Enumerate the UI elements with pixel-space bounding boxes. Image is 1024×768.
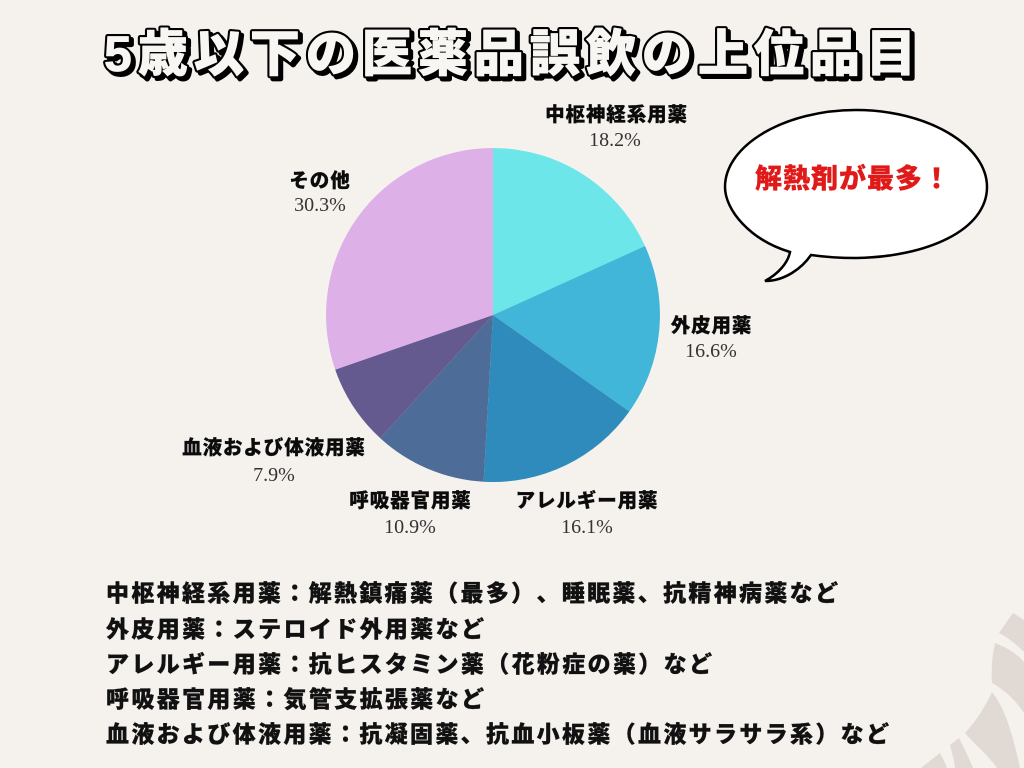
line 2: 外皮用薬：ステロイド外用薬など [106,616,484,642]
label: 血液および体液用薬 7.9%: 血液および体液用薬 [182,437,366,459]
slice: 呼吸器官用薬 [380,315,493,482]
label: アレルギー用薬 16.1% [516,490,658,538]
line 5: 血液および体液用薬：抗凝固薬、抗血小板薬（血液サラサラ系）など [106,721,889,747]
label: 血液および体液用薬 7.9% [182,437,366,486]
label: 中枢神経系用薬 18.2%: 中枢神経系用薬 [545,103,688,126]
label: 外皮用薬 16.6%: 16.6% [685,340,737,362]
label: 外皮用薬 16.6%: 外皮用薬 [671,314,752,337]
label: アレルギー用薬 16.1%: 16.1% [561,516,613,538]
callout: speech bubble [725,110,987,281]
decorative corner shapes [921,613,1024,768]
label: その他 30.3% [289,170,351,216]
label: 呼吸器官用薬 10.9%: 呼吸器官用薬 [349,490,472,512]
slice: その他 [326,148,493,370]
title: 5歳以下の医薬品誤飲の上位品目 [104,26,916,82]
line 3: アレルギー用薬：抗ヒスタミン薬（花粉症の薬）など [106,651,712,677]
label: 血液および体液用薬 7.9%: 7.9% [253,464,295,486]
pie chart [326,148,660,482]
label: 呼吸器官用薬 10.9%: 10.9% [384,516,436,538]
bubble shape [725,110,987,281]
slice: 血液および体液用薬 [335,315,493,438]
label: 外皮用薬 16.6% [671,314,752,362]
label: 中枢神経系用薬 18.2% [545,103,688,151]
label: 呼吸器官用薬 10.9% [349,490,472,538]
label: アレルギー用薬 16.1%: アレルギー用薬 [516,490,658,512]
slice: アレルギー用薬 [484,315,629,482]
bubble text: 解熱剤が最多！ [755,163,950,194]
slice: 外皮用薬 [493,246,660,412]
title: 5歳以下の医薬品誤飲の上位品目 [104,26,916,82]
line 4: 呼吸器官用薬：気管支拡張薬など [106,686,484,712]
slice: 中枢神経系用薬 [493,148,645,315]
title: 5歳以下の医薬品誤飲の上位品目 [107,29,919,85]
label: 中枢神経系用薬 18.2%: 18.2% [589,129,641,151]
line 1: 中枢神経系用薬：解熱鎮痛薬（最多）、睡眠薬、抗精神病薬など [106,580,838,606]
label: その他 30.3%: 30.3% [294,194,346,216]
description list [106,580,889,747]
label: その他 30.3%: その他 [289,170,351,192]
